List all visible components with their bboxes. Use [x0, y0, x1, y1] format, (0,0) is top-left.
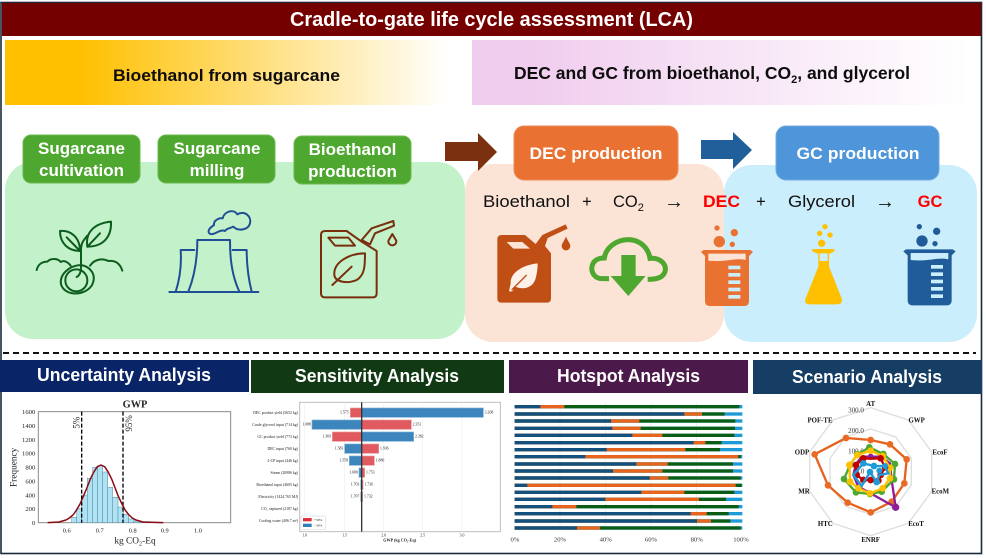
- chart: tornado sensitivity: Electricity (1424.765 MJ): [258, 495, 299, 499]
- chart: GWP histogram: 1600: [22, 409, 36, 416]
- banner: bioethanol from sugarcane: Bioethanol from sugarcane: [113, 66, 340, 85]
- icon: glycerol flask: [805, 224, 842, 304]
- chart: scenario radar: EcoT: [908, 521, 924, 528]
- chart: GWP histogram: 95%: [124, 415, 134, 432]
- heading: scenario analysis: Scenario Analysis: [792, 367, 942, 387]
- heading: uncertainty analysis: Uncertainty Analysis: [37, 365, 211, 385]
- icon: biofuel can outline: [321, 221, 396, 297]
- chart: GWP histogram: 0.6: [63, 527, 71, 534]
- label: sugarcane milling: Sugarcane: [174, 139, 260, 158]
- heading: sensitivity analysis: Sensitivity Analysis: [295, 366, 459, 386]
- title banner: [2, 3, 981, 36]
- chart: scenario radar: EcoF: [932, 449, 948, 456]
- chart: tornado sensitivity: Cooling water (406.7 m³): [259, 519, 299, 523]
- chart: tornado sensitivity: 1.369: [322, 435, 331, 439]
- label: bioethanol production: production: [308, 162, 397, 181]
- chart: tornado sensitivity: 2.382: [415, 435, 424, 439]
- chart: tornado sensitivity: 1.736: [364, 483, 373, 487]
- series: light blue: [853, 460, 888, 486]
- chart: tornado sensitivity: GC product yield (773 kg): [257, 435, 299, 439]
- chart: hotspot stacked bars: 80%: [691, 537, 703, 544]
- reaction equation: +: [756, 193, 766, 211]
- chart: GWP histogram: 1000: [22, 451, 36, 458]
- chart: GWP histogram: kg CO₂-Eq: [114, 537, 156, 547]
- chart: scenario radar: ENRF: [861, 537, 880, 544]
- reaction equation: GC: [918, 193, 942, 211]
- chart: GWP histogram: 800: [25, 465, 36, 472]
- chart: GWP histogram: 0.7: [96, 527, 104, 534]
- chart: tornado sensitivity: DEC product yield (5652 kg): [253, 411, 299, 415]
- label: sugarcane cultivation: cultivation: [39, 161, 124, 180]
- chart: GWP histogram: Frequency: [10, 447, 20, 487]
- chart: tornado sensitivity: Bioethanol input (4605 kg): [256, 483, 299, 487]
- heading: hotspot analysis: Hotspot Analysis: [557, 366, 700, 386]
- label: GC production: GC production: [796, 144, 920, 163]
- chart: tornado sensitivity: DEC input (760 kg): [267, 447, 299, 451]
- heading: uncertainty analysis: [0, 360, 249, 392]
- chart: scenario radar: ODP: [795, 449, 809, 456]
- label: DEC production: DEC production: [530, 144, 662, 163]
- chart: tornado sensitivity: 1.583: [335, 447, 343, 451]
- reaction equation: Glycerol: [788, 193, 855, 211]
- chart: GWP histogram: 5%: [72, 416, 82, 429]
- chart: scenario radar: 200.0: [848, 427, 864, 435]
- series: orange: [811, 435, 910, 516]
- banner: DEC and GC: [472, 40, 977, 105]
- chart: GWP histogram: 1200: [22, 437, 36, 444]
- chart: scenario radar: HTC: [818, 521, 833, 528]
- chart: tornado sensitivity: 2.5: [420, 533, 425, 537]
- chart: GWP histogram: 400: [25, 492, 36, 499]
- chart: hotspot stacked bars: 20%: [554, 537, 567, 544]
- heading: sensitivity analysis: [251, 360, 504, 393]
- chart: tornado sensitivity: Crude glycerol input (714 kg): [252, 423, 299, 427]
- chart: tornado sensitivity: CO₂ captured (2187 kg): [261, 507, 299, 511]
- panel: GC stage: [724, 165, 977, 342]
- reaction equation: →: [664, 191, 684, 213]
- chart: tornado sensitivity: Steam (20986 kg): [271, 471, 299, 475]
- panel: DEC stage: [465, 164, 724, 342]
- reaction equation: 2: [638, 202, 644, 214]
- chart: hotspot stacked bars: 60%: [645, 537, 658, 544]
- label: sugarcane cultivation: [23, 135, 140, 183]
- chart: tornado sensitivity: 1.558: [339, 459, 348, 463]
- icon: CO2 cloud capture: [592, 240, 665, 296]
- reaction equation: [483, 191, 942, 214]
- chart: tornado sensitivity: GWP (kg CO₂-Eq): [383, 537, 417, 542]
- icon: sprouting plant: [37, 222, 122, 294]
- reaction equation: DEC: [703, 193, 740, 211]
- chart: tornado sensitivity: 2.0: [381, 533, 386, 537]
- chart: scenario radar: EcoM: [932, 489, 950, 496]
- banner: DEC and GC: , and glycerol: [797, 63, 910, 83]
- title banner: Cradle-to-gate life cycle assessment (LCA): [290, 9, 693, 31]
- reaction equation: Bioethanol: [483, 193, 570, 211]
- chart: tornado sensitivity: 1.936: [380, 447, 389, 451]
- banner: DEC and GC: 2: [791, 74, 797, 86]
- chart: tornado sensitivity: 1.680: [349, 471, 358, 475]
- chart: tornado sensitivity: 1.0: [302, 533, 307, 537]
- chart: hotspot stacked bars: 0%: [511, 537, 520, 544]
- label: bioethanol production: Bioethanol: [309, 140, 396, 159]
- chart: scenario radar: POF-TE: [807, 417, 833, 424]
- chart: scenario radar: AT: [866, 401, 876, 408]
- chart: tornado sensitivity: 3.0: [460, 533, 464, 537]
- chart: scenario radar: 300.0: [848, 407, 864, 415]
- label: sugarcane milling: [158, 135, 275, 183]
- reaction equation: +: [582, 193, 592, 211]
- series: green: [841, 444, 898, 497]
- icon: GC beaker: [903, 224, 956, 305]
- reaction equation: CO: [613, 193, 638, 211]
- arrow: brown: [445, 133, 497, 171]
- chart: tornado sensitivity: 1.575: [340, 411, 349, 415]
- label: bioethanol production: [294, 136, 411, 184]
- chart: GWP histogram: 0.8: [129, 527, 137, 534]
- banner: DEC and GC: DEC and GC from bioethanol, CO: [514, 63, 791, 83]
- chart: scenario radar: [795, 401, 950, 544]
- chart: tornado sensitivity: 2-CP input (446 kg): [267, 459, 299, 463]
- chart: tornado sensitivity: [252, 402, 500, 542]
- heading: hotspot analysis: [509, 360, 748, 393]
- legend: −30%: [314, 524, 322, 528]
- chart: scenario radar: 100.0: [848, 448, 864, 456]
- series: dark red: [853, 455, 888, 484]
- chart: tornado sensitivity: 1.753: [366, 471, 375, 475]
- heading: scenario analysis: [753, 360, 982, 394]
- legend: +30%: [314, 518, 322, 522]
- chart: tornado sensitivity: 1.707: [351, 495, 359, 499]
- chart: tornado sensitivity: 1.088: [302, 423, 311, 427]
- legend: [301, 516, 325, 530]
- chart: scenario radar: 0.0: [856, 468, 865, 476]
- chart: tornado sensitivity: 1.703: [351, 483, 359, 487]
- chart: hotspot stacked bars: 40%: [600, 537, 612, 544]
- arrow: blue: [701, 132, 752, 169]
- label: DEC production: [514, 126, 678, 180]
- chart: scenario radar: GWP: [909, 417, 925, 424]
- reaction equation: →: [875, 191, 895, 213]
- chart: scenario radar: MR: [798, 489, 810, 496]
- chart: tornado sensitivity: 1.732: [364, 495, 373, 499]
- chart: GWP histogram: GWP: [123, 400, 148, 411]
- label: sugarcane cultivation: Sugarcane: [38, 139, 125, 158]
- chart: GWP histogram: 0: [32, 520, 36, 527]
- banner: bioethanol from sugarcane: [5, 40, 472, 105]
- label: GC production: [776, 126, 939, 180]
- chart: tornado sensitivity: 1.880: [376, 459, 384, 463]
- icon: bioethanol can filled: [497, 224, 570, 303]
- chart: tornado sensitivity: 1.5: [342, 533, 347, 537]
- icon: DEC beaker: [701, 225, 753, 306]
- chart: hotspot stacked bars: 100%: [733, 537, 749, 544]
- chart: GWP histogram: 0.9: [161, 527, 169, 534]
- panel: sugarcane stages: [5, 162, 465, 339]
- chart: GWP histogram: 1.0: [194, 527, 202, 534]
- series: purple: [853, 454, 899, 511]
- label: sugarcane milling: milling: [190, 161, 244, 180]
- chart: GWP histogram: 600: [25, 478, 36, 485]
- chart: hotspot stacked bars: [511, 403, 749, 544]
- chart: tornado sensitivity: 3.268: [485, 411, 493, 415]
- icon: factory cooling towers: [169, 211, 258, 292]
- series: yellow: [846, 447, 893, 497]
- chart: GWP histogram: 200: [25, 506, 36, 513]
- chart: GWP histogram: [10, 400, 231, 547]
- chart: GWP histogram: 1400: [22, 423, 36, 430]
- chart: tornado sensitivity: 2.351: [413, 423, 421, 427]
